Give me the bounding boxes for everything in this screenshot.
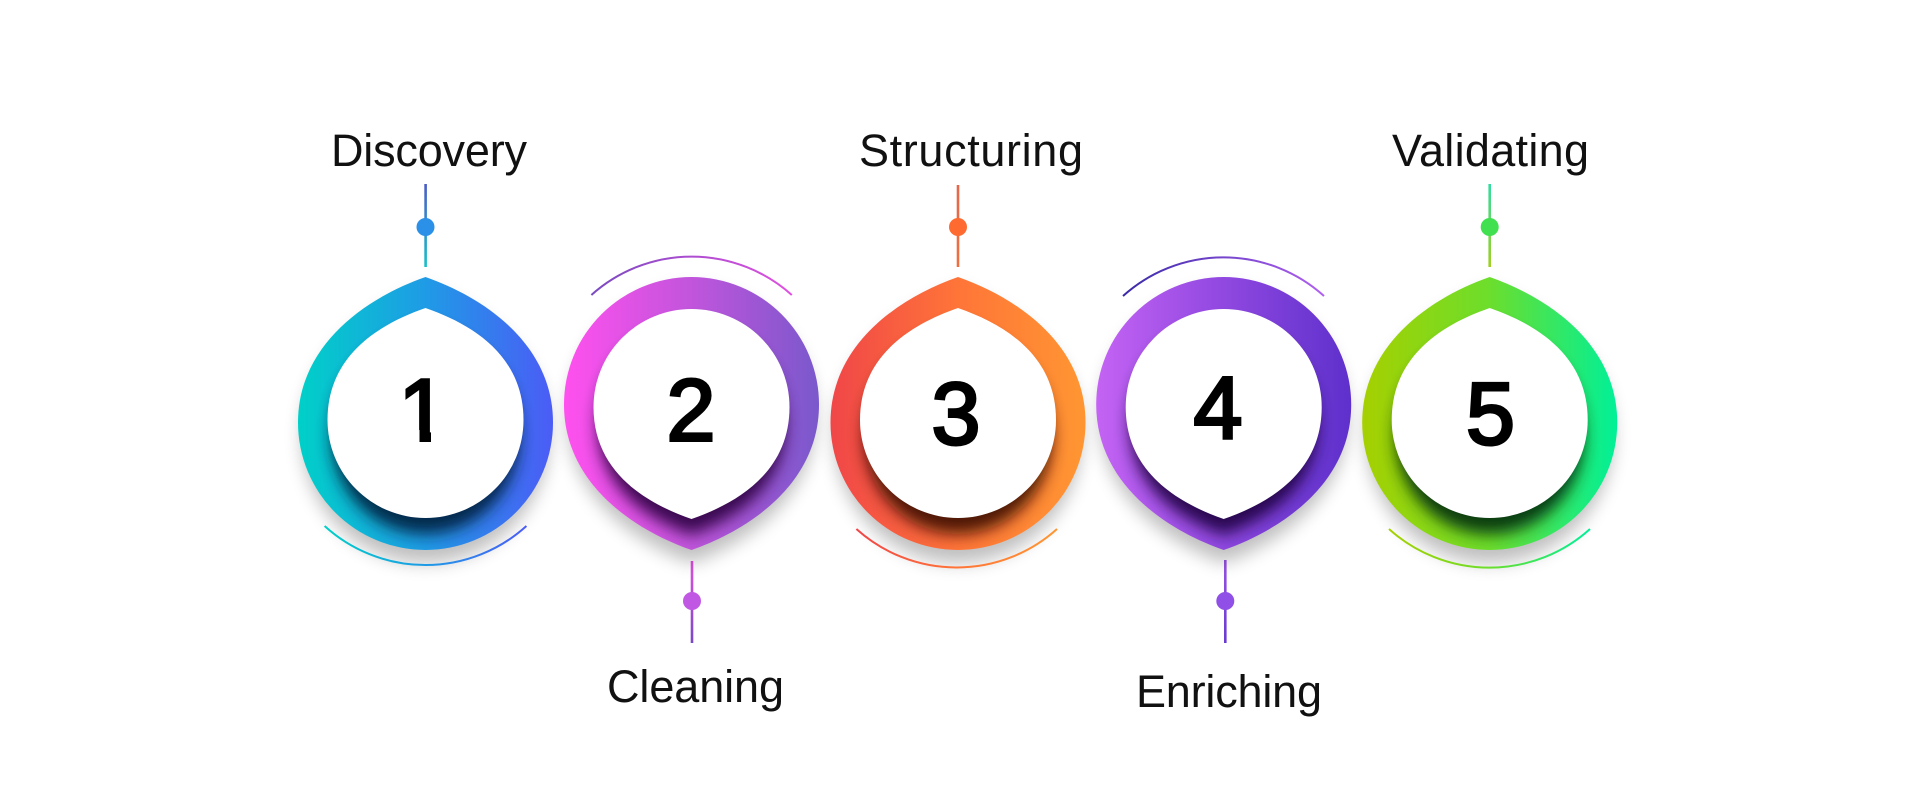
arc above petal 4 bbox=[1123, 257, 1324, 296]
label: Validating: Validating bbox=[1392, 125, 1589, 176]
label: Enriching: Enriching bbox=[1136, 666, 1322, 717]
step 1: Discovery bbox=[298, 125, 553, 565]
label: Cleaning: Cleaning bbox=[607, 661, 784, 712]
number 5: 5 bbox=[1466, 364, 1515, 463]
step 4: Enriching bbox=[1096, 257, 1351, 717]
arc above petal 2 bbox=[591, 257, 792, 295]
number 3: 3 bbox=[932, 364, 980, 463]
number 2: 2 bbox=[667, 360, 715, 460]
connector with dot 4 bbox=[1216, 560, 1234, 643]
label: Discovery: Discovery bbox=[331, 125, 528, 176]
step 2: Cleaning bbox=[564, 257, 819, 712]
petal ring 4 bbox=[1096, 277, 1351, 563]
arc under petal 5 bbox=[1389, 529, 1590, 568]
petal ring 2 bbox=[564, 277, 819, 563]
step 5: Validating bbox=[1362, 125, 1617, 568]
petal ring 1 bbox=[298, 277, 553, 563]
petal ring 3 bbox=[830, 277, 1086, 563]
connector with dot 5 bbox=[1481, 184, 1499, 267]
number 1: 1 bbox=[399, 360, 447, 460]
step 3: Structuring bbox=[830, 125, 1086, 567]
connector with dot 1 bbox=[416, 184, 434, 267]
connector with dot 2 bbox=[683, 561, 701, 643]
label: Structuring: Structuring bbox=[859, 125, 1083, 176]
number 4: 4 bbox=[1194, 358, 1242, 458]
connector with dot 3 bbox=[949, 185, 967, 267]
arc under petal 3 bbox=[856, 529, 1057, 567]
petal ring 5 bbox=[1362, 277, 1617, 563]
arc under petal 1 bbox=[325, 526, 526, 565]
